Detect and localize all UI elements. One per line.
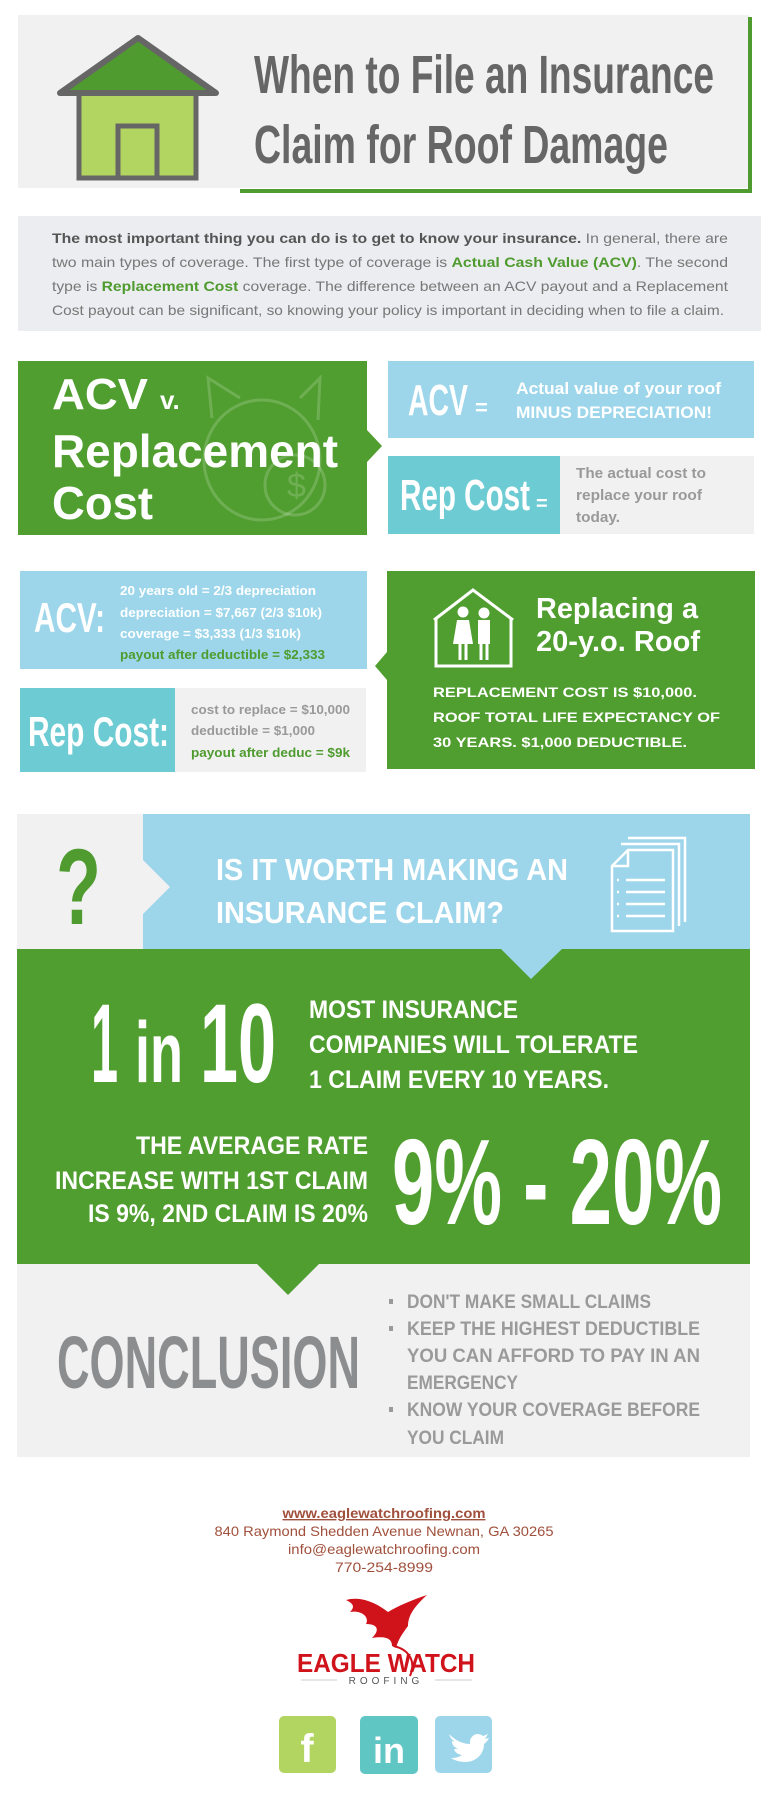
panel: ACV definition: MINUS DEPRECIATION!	[516, 403, 712, 422]
panel: Replacing a 20-y.o. Roof: Replacing a	[536, 593, 699, 625]
intro text block: The most important thing you can do is to get to know your insurance. In general, there are	[52, 230, 728, 246]
panel: ACV example: coverage = $3,333 (1/3 $10k)	[120, 626, 301, 641]
footer contact info: info@eaglewatchroofing.com	[288, 1541, 480, 1557]
stat: 1 in 10: in	[135, 1005, 183, 1101]
panel: Rep Cost definition: Rep Cost	[400, 471, 530, 520]
logo: Eagle Watch Roofing: EAGLE WATCH	[297, 1648, 475, 1678]
panel: Rep Cost example: Rep Cost:	[28, 708, 169, 755]
icon: documents	[612, 838, 685, 931]
icon: family house	[434, 590, 513, 666]
icon: piggy bank	[204, 378, 325, 520]
stat: 1 in 10: 10	[200, 981, 276, 1106]
footer contact info: 840 Raymond Shedden Avenue Newnan, GA 30265	[214, 1523, 554, 1539]
panel: statistics: COMPANIES WILL TOLERATE	[309, 1031, 638, 1059]
conclusion bullets: YOU CAN AFFORD TO PAY IN AN	[407, 1346, 700, 1367]
panel: Replacing a 20-y.o. Roof: 30 YEARS. $1,000 DEDUCTIBLE.	[433, 734, 687, 750]
panel: conclusion	[17, 1263, 750, 1457]
social icons	[279, 1716, 492, 1774]
intro text block	[18, 216, 761, 331]
panel: ACV v. Replacement Cost: ACV	[52, 370, 149, 419]
panel: ACV example: ACV:	[34, 594, 105, 641]
panel: statistics: 1 CLAIM EVERY 10 YEARS.	[309, 1066, 609, 1094]
icon: facebook: f	[300, 1727, 314, 1771]
panel: question header: INSURANCE CLAIM?	[216, 895, 504, 930]
logo: Eagle Watch Roofing: ROOFING	[349, 1676, 423, 1687]
icon: linkedin	[360, 1716, 418, 1774]
intro text block: Cost payout can be significant, so knowing your policy is important in deciding when to file a claim.	[52, 302, 724, 318]
panel: ACV example: depreciation = $7,667 (2/3 $10k)	[120, 605, 322, 620]
panel: ACV example	[20, 571, 367, 669]
panel: Rep Cost definition: replace your roof	[576, 487, 703, 504]
stat: 1 in 10	[91, 981, 276, 1106]
panel: Replacing a 20-y.o. Roof: ROOF TOTAL LIFE EXPECTANCY OF	[433, 709, 721, 725]
stat: rate increase: THE AVERAGE RATE	[136, 1132, 368, 1160]
panel: Replacing a 20-y.o. Roof	[375, 571, 755, 769]
panel: ACV example: 20 years old = 2/3 depreciation	[120, 583, 316, 598]
header panel	[18, 15, 750, 191]
panel: Replacing a 20-y.o. Roof: REPLACEMENT COST IS $10,000.	[433, 684, 697, 700]
icon: facebook	[279, 1716, 336, 1773]
panel: statistics	[17, 948, 750, 1264]
panel: ACV v. Replacement Cost: v.	[160, 385, 180, 415]
panel: conclusion: CONCLUSION	[57, 1321, 360, 1404]
icon: piggy bank: $	[287, 467, 306, 505]
panel: ACV definition: ACV	[408, 376, 468, 425]
panel: ACV example: payout after deductible = $2,333	[120, 647, 325, 662]
footer contact info: 770-254-8999	[335, 1559, 433, 1575]
panel: Rep Cost definition	[388, 456, 754, 534]
panel: Rep Cost example	[20, 688, 366, 772]
footer contact info	[214, 1505, 554, 1575]
panel: question header	[17, 814, 750, 949]
conclusion bullets: KEEP THE HIGHEST DEDUCTIBLE	[407, 1319, 700, 1340]
panel: ACV v. Replacement Cost: Replacement	[52, 425, 338, 477]
panel: Rep Cost definition: The actual cost to	[576, 465, 706, 482]
panel: Rep Cost example: deductible = $1,000	[191, 723, 315, 738]
icon: question mark: ?	[56, 826, 101, 947]
panel: Rep Cost example: cost to replace = $10,000	[191, 702, 350, 717]
conclusion bullets: EMERGENCY	[407, 1373, 518, 1394]
stat: rate increase	[55, 1132, 368, 1228]
panel: Rep Cost example: payout after deduc = $9k	[191, 745, 351, 760]
stat: rate increase: INCREASE WITH 1ST CLAIM	[55, 1167, 368, 1195]
stat: 1 in 10: 1	[91, 981, 118, 1106]
intro text block: two main types of coverage. The first type of coverage is Actual Cash Value (ACV) . The second	[52, 254, 728, 270]
conclusion bullets: KNOW YOUR COVERAGE BEFORE	[407, 1400, 700, 1421]
stat: rate increase: IS 9%, 2ND CLAIM IS 20%	[88, 1200, 368, 1228]
intro text block: type is Replacement Cost coverage. The difference between an ACV payout and a Replacement	[52, 278, 728, 294]
panel: question header: IS IT WORTH MAKING AN	[216, 852, 568, 887]
panel: Rep Cost definition: today.	[576, 509, 620, 526]
icon: house	[60, 38, 216, 178]
panel: ACV definition	[388, 361, 754, 438]
panel: ACV v. Replacement Cost: Cost	[52, 477, 153, 529]
conclusion bullets: YOU CLAIM	[407, 1428, 504, 1449]
logo: Eagle Watch Roofing	[297, 1595, 475, 1687]
panel: ACV definition: Actual value of your roof	[516, 379, 721, 398]
panel: Rep Cost definition: =	[536, 493, 548, 515]
panel: statistics: MOST INSURANCE	[309, 996, 518, 1024]
icon: twitter	[435, 1716, 492, 1773]
panel: ACV v. Replacement Cost	[18, 361, 382, 535]
panel: ACV definition: =	[475, 395, 488, 420]
conclusion bullets: DON'T MAKE SMALL CLAIMS	[407, 1292, 651, 1313]
footer contact info: www.eaglewatchroofing.com	[281, 1505, 486, 1521]
panel: Replacing a 20-y.o. Roof: 20-y.o. Roof	[536, 626, 700, 658]
conclusion bullets	[389, 1292, 700, 1449]
title	[254, 45, 714, 175]
icon: linkedin: in	[373, 1730, 405, 1771]
